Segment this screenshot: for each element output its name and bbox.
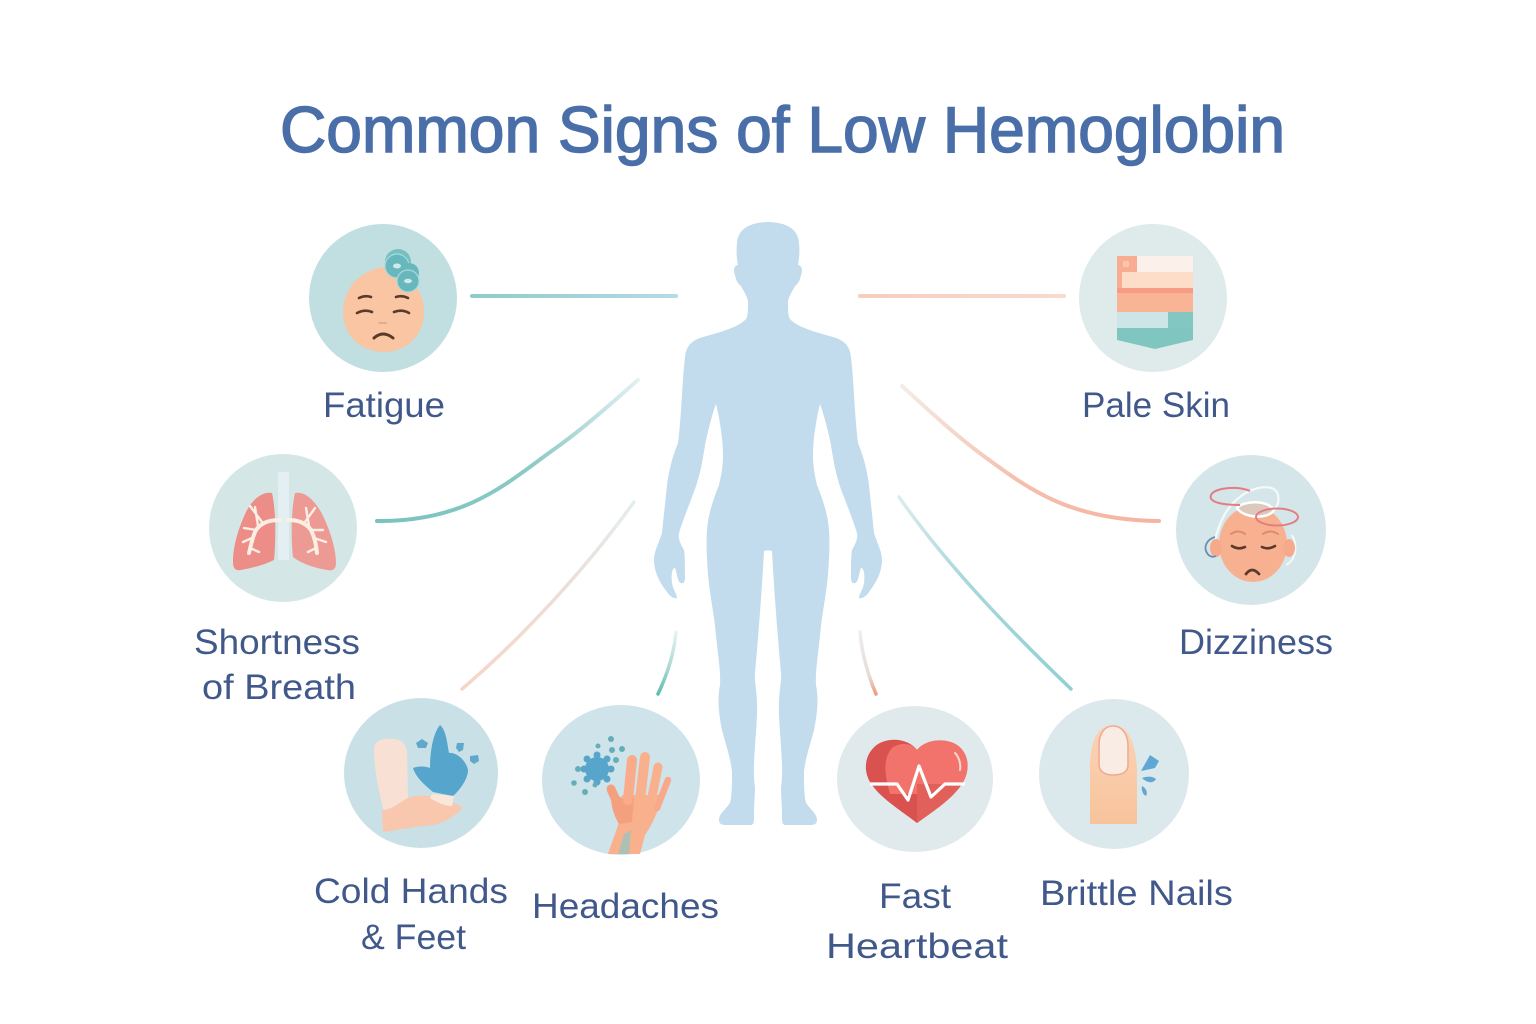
hair cap [1237, 502, 1274, 517]
white halo [1214, 487, 1278, 545]
thumb [611, 789, 621, 812]
trachea [278, 472, 289, 560]
finger [1090, 725, 1137, 824]
title: Common Signs of Low Hemoglobin [280, 93, 1285, 166]
label: Cold Hands & Feet [314, 872, 508, 957]
circle background [309, 224, 457, 372]
line: dizziness [902, 386, 1159, 521]
facial features [1231, 532, 1278, 574]
warm hand [382, 796, 463, 832]
label: Shortness of Breath [194, 623, 360, 707]
label: Cold Hands & Feet: Cold Hands [314, 872, 508, 911]
teal cells [385, 249, 419, 292]
line: shortness of breath [377, 380, 638, 521]
shine [955, 753, 960, 770]
line: headaches [658, 632, 676, 694]
left palm shade [611, 792, 634, 824]
heart [866, 740, 968, 823]
circle background [1079, 224, 1227, 372]
icon: dizziness [1176, 455, 1326, 605]
nail [1099, 726, 1128, 775]
circle background [542, 705, 700, 855]
label: Dizziness: Dizziness [1179, 623, 1333, 662]
particles [571, 736, 625, 795]
icon: pale skin [1079, 224, 1227, 372]
icon: fatigue [309, 224, 457, 372]
circle background [1039, 699, 1189, 849]
bronchi [243, 506, 326, 553]
label: Shortness of Breath: Shortness [194, 623, 360, 662]
heart lower right [917, 784, 962, 823]
label: Fatigue: Fatigue [323, 386, 445, 425]
line: pale skin [858, 294, 1066, 298]
line: fast heartbeat [860, 632, 876, 694]
label: Fast Heartbeat: Heartbeat [826, 927, 1008, 966]
label: Headaches: Headaches [532, 887, 719, 926]
skin layers [1117, 256, 1193, 349]
label: Fast Heartbeat [826, 877, 1008, 966]
icon: cold hands and feet [344, 698, 498, 848]
label: Fast Heartbeat: Fast [879, 877, 951, 916]
blue cold hand [413, 725, 468, 796]
icon: brittle nails [1039, 699, 1189, 849]
body silhouette [654, 222, 882, 825]
right lung [292, 493, 336, 570]
face [343, 267, 424, 352]
palm and wrist [608, 795, 660, 854]
circle background [837, 706, 993, 852]
hand [608, 757, 668, 854]
blue squiggle [1205, 537, 1216, 557]
circle background [209, 454, 357, 602]
virus [580, 752, 614, 786]
pale hand [374, 739, 408, 812]
heart highlight [885, 740, 968, 794]
label: Brittle Nails: Brittle Nails [1040, 874, 1233, 913]
icon: headaches [542, 705, 700, 855]
circle background [1176, 455, 1326, 605]
line: brittle nails [899, 497, 1071, 689]
circle background [344, 698, 498, 848]
wrist vein [618, 830, 631, 854]
line: fatigue [470, 294, 678, 298]
label: Pale Skin: Pale Skin [1082, 386, 1230, 425]
cuff highlight [430, 794, 454, 806]
left lung [233, 493, 275, 570]
ECG line [870, 766, 965, 800]
icon: fast heartbeat [837, 706, 993, 852]
red dizzy rings [1211, 488, 1298, 526]
facial features [357, 296, 409, 338]
water drops [1141, 755, 1159, 796]
icon: lungs [209, 454, 357, 602]
line: cold hands [462, 502, 634, 689]
nose [379, 322, 386, 324]
fingers [628, 760, 632, 800]
label: Cold Hands & Feet: & Feet [361, 918, 466, 957]
connector lines [377, 294, 1159, 694]
ice fragments [416, 739, 479, 764]
head [1219, 506, 1287, 582]
label: Shortness of Breath: of Breath [202, 668, 356, 707]
